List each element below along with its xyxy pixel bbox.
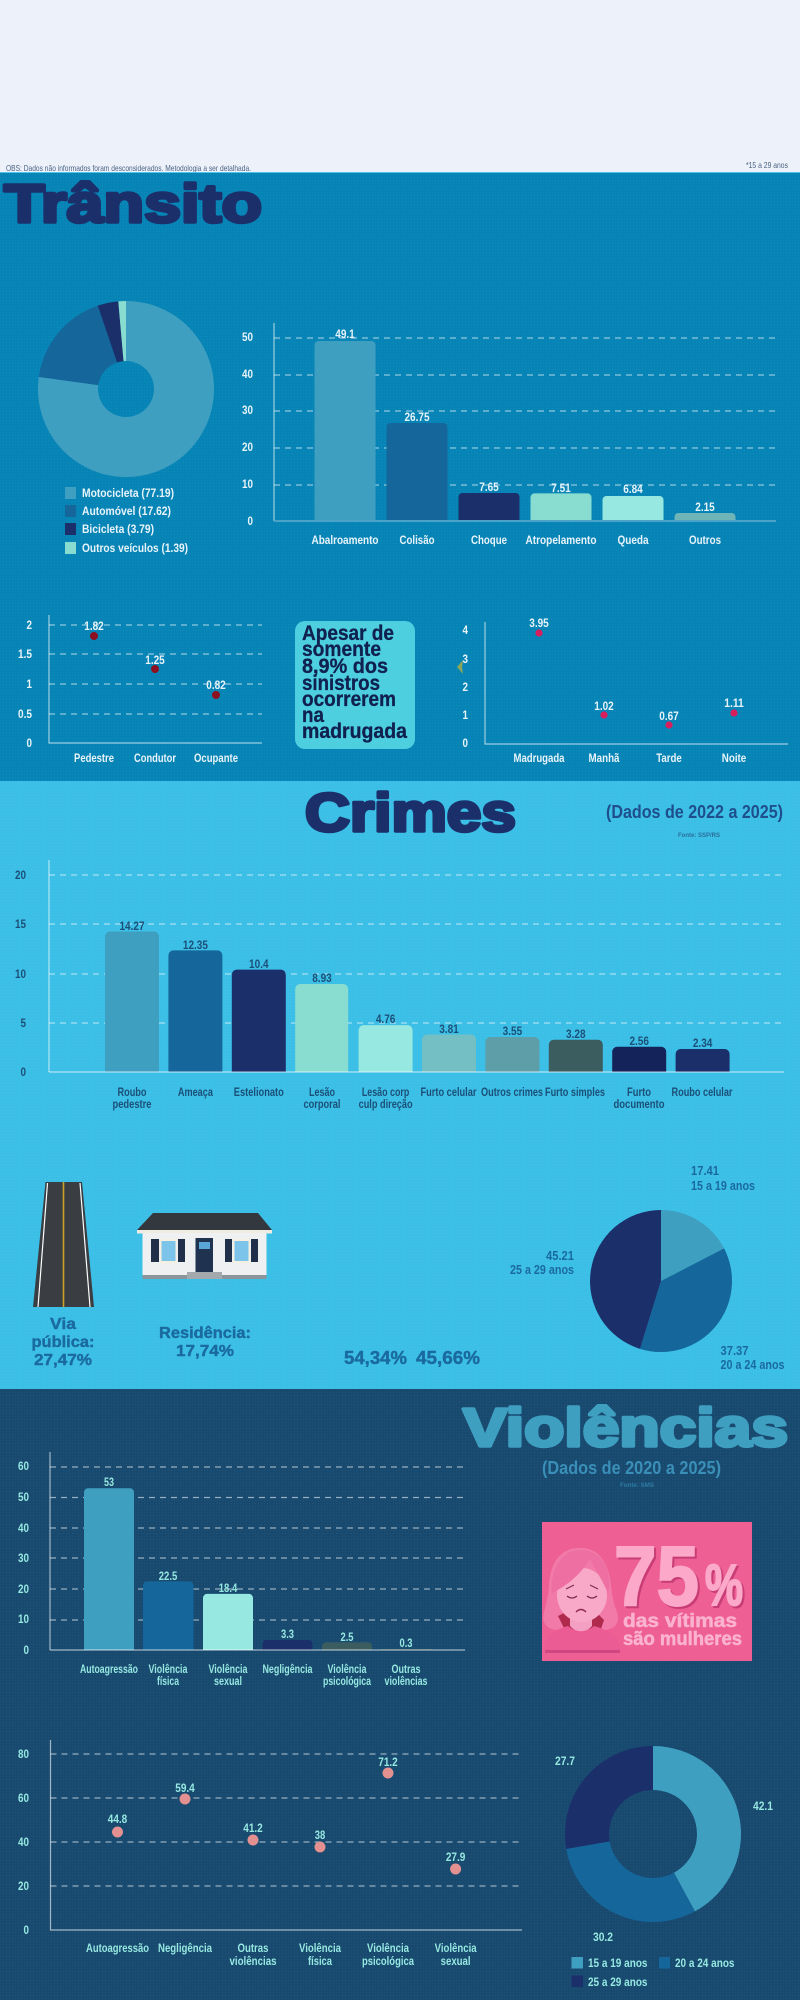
pie labels: 45.21 (546, 1248, 574, 1263)
dot chart: violence rates: 41.2 (243, 1821, 263, 1835)
bar chart: violence types: 10 (18, 1612, 29, 1626)
text: das vítimas são mulheres (623, 1611, 742, 1650)
dot chart: time of day: 1 (462, 708, 468, 722)
donut chart: vehicles (38, 301, 214, 477)
legend: vehicles: Automóvel (17.62) (82, 504, 171, 518)
bar chart: accident types (242, 323, 776, 547)
dot chart: time of day: 0 (462, 736, 468, 750)
dot chart: time of day: 4 (462, 623, 468, 637)
bar chart: crime types: 2.56 (629, 1034, 649, 1048)
dot chart: violence rates: 40 (18, 1835, 29, 1849)
dot chart: violence rates (18, 1740, 522, 1968)
legend: vehicles (65, 486, 188, 555)
bar chart: crime types: Ameaça (178, 1085, 213, 1099)
bar chart: accident types: 2.15 (695, 500, 715, 514)
pie labels: 17.41 (691, 1163, 719, 1178)
icon: arrow (457, 660, 463, 674)
bar chart: accident types: 40 (242, 367, 253, 381)
bar chart: crime types: 15 (15, 917, 26, 931)
bar chart: violence types: 60 (18, 1459, 29, 1473)
label: Via pública: pública: (32, 1334, 94, 1351)
bar chart: violence types: 30 (18, 1551, 29, 1565)
bar chart: violence types: 53 (104, 1475, 114, 1489)
bar chart: accident types: 49.1 (335, 327, 355, 341)
bar chart: crime types: 3.81 (439, 1022, 459, 1036)
bar chart: crime types: 14.27 (120, 919, 145, 933)
bar chart: crime types: 12.35 (183, 938, 208, 952)
dot chart: victim role: Pedestre (74, 751, 114, 765)
bar chart: violence types: 18.4 (219, 1581, 238, 1595)
dot chart: violence rates: psicológica (362, 1954, 414, 1968)
pie labels: 37.37 (720, 1343, 748, 1358)
dot chart: violence rates: 0 (24, 1923, 29, 1937)
bar chart: crime types: documento (614, 1097, 664, 1111)
bar chart: crime types: Roubo (118, 1085, 146, 1099)
pie labels: 20 a 24 anos (720, 1357, 784, 1372)
bar chart: accident types: 0 (248, 514, 253, 528)
bar chart: violence types: 40 (18, 1521, 29, 1535)
bar chart: accident types: 26.75 (404, 410, 430, 424)
bar chart: crime types: 3.28 (566, 1027, 586, 1041)
dot chart: violence rates: 59.4 (175, 1781, 195, 1795)
bar chart: accident types: Atropelamento (526, 533, 596, 547)
donut labels (555, 1754, 773, 1944)
bar chart: crime types: Outros crimes (481, 1085, 543, 1099)
label: percentages: 45,66% (416, 1348, 480, 1368)
bar chart: accident types: Queda (618, 533, 649, 547)
dot chart: victim role: 1.5 (18, 647, 32, 661)
pie labels (510, 1163, 784, 1372)
donut chart: violence age groups (565, 1746, 741, 1922)
icon: road (33, 1182, 94, 1307)
label: Residência: 17,74% (176, 1343, 234, 1360)
dot chart: violence rates: Violência (367, 1941, 409, 1955)
bar chart: accident types: 30 (242, 403, 253, 417)
dot chart: time of day: Madrugada (514, 751, 565, 765)
bar chart: crime types: Estelionato (234, 1085, 284, 1099)
bar chart: accident types: 7.51 (551, 481, 571, 495)
panel: Trânsito (0, 172, 800, 781)
bar chart: accident types: 20 (242, 440, 253, 454)
label: Via pública (32, 1316, 94, 1369)
label: Via pública: Via (50, 1316, 76, 1333)
donut labels: 27.7 (555, 1754, 575, 1768)
bar chart: crime types: 20 (15, 868, 26, 882)
bar chart: crime types: 3.55 (503, 1024, 522, 1038)
heading: Trânsito: Trânsito (4, 174, 262, 234)
bar chart: violence types: Negligência (262, 1662, 313, 1676)
bar chart: crime types: 4.76 (376, 1012, 396, 1026)
bar chart: crime types: 5 (20, 1016, 26, 1030)
text: das vítimas são mulheres: das vítimas (623, 1611, 737, 1632)
dot chart: victim role: Condutor (134, 751, 176, 765)
callout: madrugada (295, 621, 415, 749)
legend: vehicles: Bicicleta (3.79) (82, 522, 154, 536)
callout: madrugada: 8,9% dos (302, 655, 388, 678)
legend: age groups: 25 a 29 anos (588, 1975, 648, 1989)
legend: vehicles: Motocicleta (77.19) (82, 486, 174, 500)
text: das vítimas são mulheres: são mulheres (623, 1629, 742, 1650)
dot chart: victim role (18, 615, 262, 765)
bar chart: accident types: Outros (689, 533, 721, 547)
bar chart: crime types: 10 (15, 967, 26, 981)
pie labels: 25 a 29 anos (510, 1262, 574, 1277)
source: Fonte: SSP/RS (678, 832, 721, 839)
text: 75%: % (705, 1553, 743, 1618)
bar chart: accident types: 50 (242, 330, 253, 344)
bar chart: violence types: 3.3 (281, 1627, 294, 1641)
text: 75%: 75 (614, 1529, 699, 1623)
dot chart: violence rates: sexual (441, 1954, 471, 1968)
callout: madrugada: somente (302, 638, 381, 661)
dot chart: violence rates: 44.8 (108, 1812, 128, 1826)
dot chart: victim role: 1.25 (145, 653, 165, 667)
callout: madrugada: Apesar de (302, 622, 394, 645)
bar chart: crime types: Lesão (309, 1085, 335, 1099)
label: percentages (344, 1348, 480, 1368)
dot chart: time of day: 0.67 (659, 709, 679, 723)
callout: madrugada: na (302, 704, 324, 727)
legend: age groups: 15 a 19 anos (588, 1956, 648, 1970)
dot chart: time of day: 3.95 (529, 616, 549, 630)
callout: madrugada: sinistros (302, 672, 380, 695)
bar chart: violence types: 50 (18, 1490, 29, 1504)
bar chart: accident types: 6.84 (623, 482, 643, 496)
bar chart: accident types: 7.65 (479, 480, 499, 494)
dot chart: violence rates: Outras (238, 1941, 269, 1955)
bar chart: crime types: Furto (627, 1085, 651, 1099)
bar chart: crime types: Furto simples (545, 1085, 605, 1099)
label: Via pública: 27,47% (34, 1352, 92, 1369)
dot chart: time of day (462, 616, 788, 765)
pie chart: crime age groups (590, 1210, 732, 1352)
dot chart: violence rates: 80 (18, 1747, 29, 1761)
bar chart: violence types: Autoagressão (80, 1662, 138, 1676)
panel: Violências (0, 1389, 800, 2000)
dot chart: time of day: 2 (462, 680, 468, 694)
bar chart: violence types: violências (384, 1674, 428, 1688)
donut labels: 42.1 (753, 1799, 773, 1813)
dot chart: violence rates: 20 (18, 1879, 29, 1893)
bar chart: crime types: culp direção (359, 1097, 413, 1111)
bar chart: crime types: Roubo celular (672, 1085, 733, 1099)
dot chart: victim role: 2 (26, 618, 32, 632)
bar chart: violence types: física (157, 1674, 179, 1688)
bar chart: accident types: 10 (242, 477, 253, 491)
bar chart: violence types: 2.5 (340, 1630, 354, 1644)
bar chart: crime types: 8.93 (312, 971, 332, 985)
bar chart: accident types: Colisão (400, 533, 434, 547)
bar chart: accident types: Choque (471, 533, 507, 547)
bar chart: violence types: psicológica (323, 1674, 371, 1688)
label: Residência: Residência: (159, 1325, 251, 1342)
bar chart: violence types: Violência (148, 1662, 188, 1676)
bar chart: crime types: Lesão corp (362, 1085, 409, 1099)
bar chart: violence types: 0 (24, 1643, 29, 1657)
dot chart: victim role: 1 (26, 677, 32, 691)
bar chart: violence types: sexual (214, 1674, 242, 1688)
subtitle: period: (Dados de 2020 a 2025) (542, 1458, 721, 1478)
header panel (0, 0, 800, 173)
bar chart: violence types: 20 (18, 1582, 29, 1596)
legend: age groups: 20 a 24 anos (675, 1956, 735, 1970)
bar chart: crime types: 0 (20, 1065, 26, 1079)
dot chart: time of day: Manhã (588, 751, 620, 765)
dot chart: violence rates: violências (230, 1954, 277, 1968)
label: Residência (159, 1325, 251, 1360)
label: percentages: 54,34% (344, 1348, 407, 1368)
heading: Crimes: Crimes (305, 783, 516, 843)
bar chart: violence types: Violência (208, 1662, 248, 1676)
dot chart: violence rates: 71.2 (378, 1755, 398, 1769)
dot chart: violence rates: física (308, 1954, 332, 1968)
icon: sad woman (543, 1548, 620, 1653)
bar chart: accident types: Abalroamento (312, 533, 378, 547)
dot chart: time of day: Tarde (656, 751, 682, 765)
callout: madrugada: madrugada (302, 720, 407, 743)
dot chart: violence rates: Violência (299, 1941, 341, 1955)
bar chart: crime types (15, 860, 784, 1111)
dot chart: violence rates: Negligência (158, 1941, 212, 1955)
dot chart: victim role: 0 (26, 736, 32, 750)
bar chart: crime types: 2.34 (693, 1036, 713, 1050)
heading: Violências: Violências (463, 1398, 788, 1458)
subtitle: period: (Dados de 2022 a 2025) (606, 802, 783, 822)
panel: Crimes (0, 781, 800, 1389)
dot chart: victim role: Ocupante (194, 751, 238, 765)
bar chart: violence types: Violência (328, 1662, 367, 1676)
bar chart: violence types: Outras (392, 1662, 421, 1676)
note: age range: *15 a 29 anos (746, 160, 788, 170)
bar chart: crime types: Furto celular (420, 1085, 477, 1099)
dot chart: violence rates: 38 (315, 1828, 325, 1842)
donut labels: 30.2 (593, 1930, 613, 1944)
dot chart: time of day: 1.02 (594, 699, 614, 713)
image card: 75% das vítimas são mulheres (542, 1522, 752, 1661)
legend: vehicles: Outros veículos (1.39) (82, 541, 188, 555)
dot chart: violence rates: Violência (435, 1941, 477, 1955)
bar chart: crime types: corporal (304, 1097, 340, 1111)
dot chart: victim role: 0.82 (206, 678, 226, 692)
legend: age groups (572, 1956, 735, 1989)
bar chart: violence types: 22.5 (159, 1569, 178, 1583)
bar chart: crime types: pedestre (112, 1097, 152, 1111)
dot chart: violence rates: 27.9 (446, 1850, 466, 1864)
dot chart: time of day: Noite (722, 751, 747, 765)
pie labels: 15 a 19 anos (691, 1178, 755, 1193)
source: Fonte: SMS (620, 1482, 655, 1489)
dot chart: victim role: 0.5 (18, 707, 32, 721)
icon: house (137, 1213, 272, 1279)
bar chart: violence types (18, 1452, 465, 1688)
dot chart: violence rates: Autoagressão (86, 1941, 149, 1955)
note: methodology: OBS: Dados não informados foram desconsiderados. Metodologia a ser detalhada. (6, 163, 251, 173)
dot chart: time of day: 3 (462, 652, 468, 666)
bar chart: violence types: 0.3 (400, 1636, 413, 1650)
dot chart: victim role: 1.82 (84, 619, 104, 633)
dot chart: violence rates: 60 (18, 1791, 29, 1805)
bar chart: crime types: 10.4 (249, 957, 269, 971)
callout: madrugada: ocorrerem (302, 688, 396, 711)
dot chart: time of day: 1.11 (724, 696, 744, 710)
